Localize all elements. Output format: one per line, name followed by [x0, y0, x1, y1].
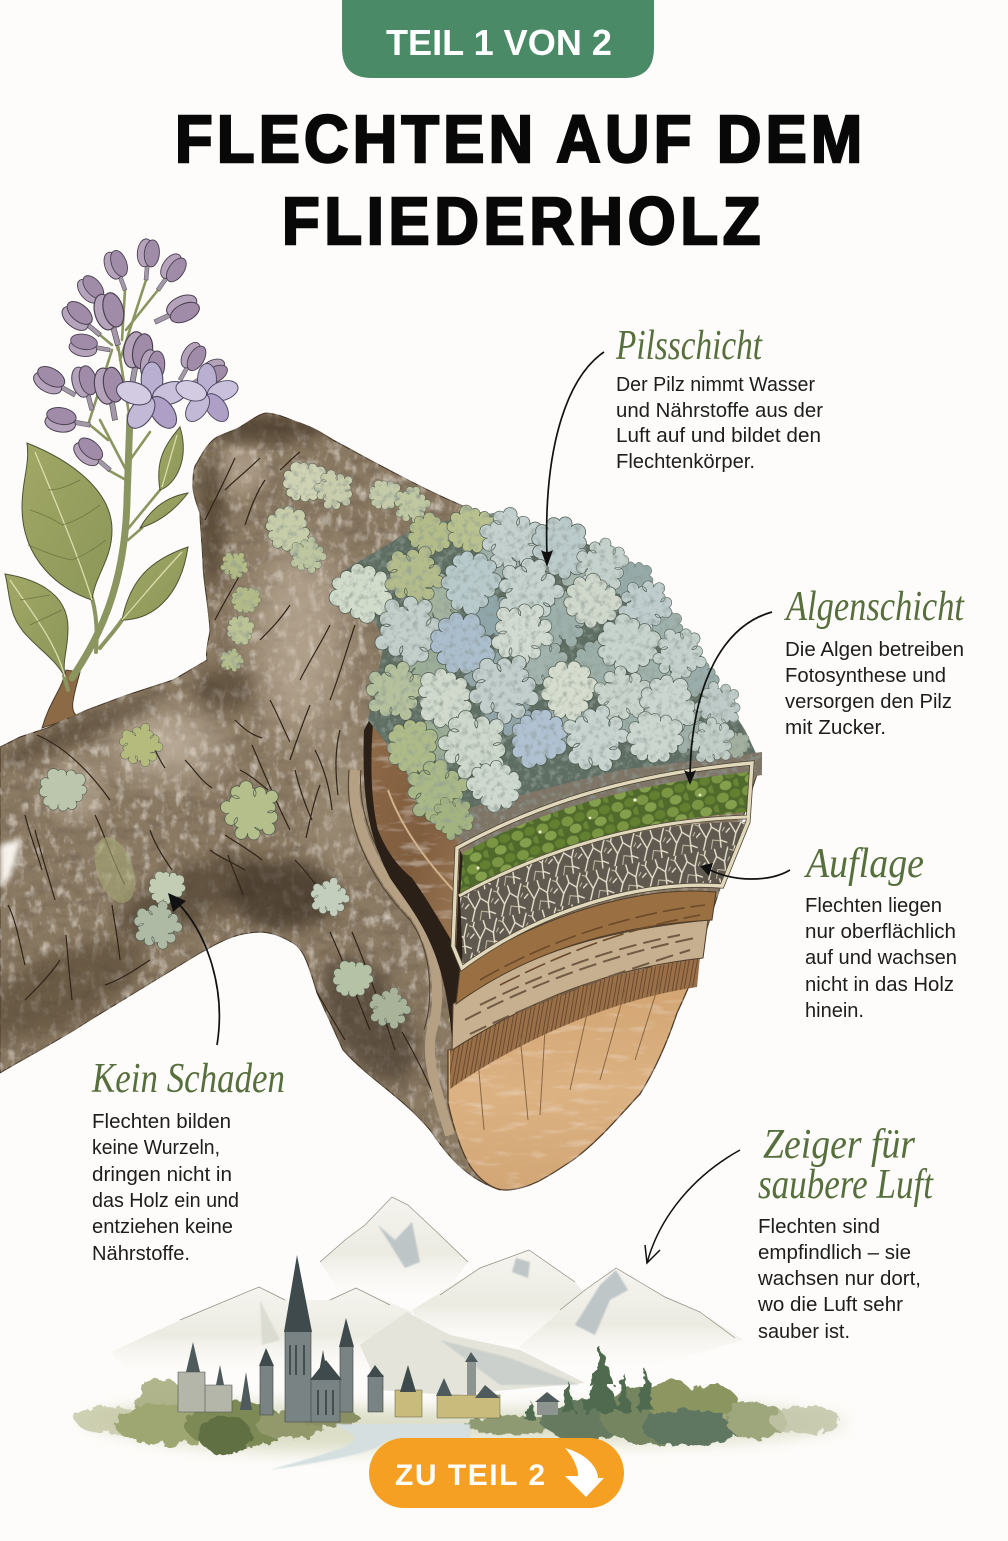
part badge: TEIL 1 VON 2: [386, 22, 612, 63]
callout: Kein Schaden: dringen nicht in: [92, 1164, 232, 1186]
callout: Zeiger für saubere Luft: saubere Luft: [758, 1162, 934, 1208]
lilac buds: [30, 238, 231, 479]
arrow: [541, 352, 604, 567]
cross-section: cream borders: [453, 763, 752, 968]
title: FLIEDERHOLZ: [282, 184, 760, 259]
callout: Auflage: auf und wachsen: [805, 947, 957, 969]
callout: Algenschicht: mit Zucker.: [785, 717, 886, 739]
lichen: under-layer filling the gaps: [392, 537, 750, 769]
lichen: main rosettes: [323, 495, 748, 843]
callout: Algenschicht: [684, 584, 965, 785]
callout: Pilsschicht: und Nährstoffe aus der: [616, 400, 823, 422]
illustration: lichen-covered branch: [0, 413, 762, 1190]
callout: Kein Schaden: Flechten bilden: [92, 1111, 231, 1133]
callout: Zeiger für saubere Luft: Zeiger für: [763, 1122, 916, 1168]
callout: Kein Schaden: entziehen keine: [92, 1216, 233, 1238]
callout: Algenschicht: Algenschicht: [784, 584, 965, 630]
callout: Pilsschicht: [541, 323, 823, 567]
callout: Auflage: Flechten liegen: [805, 895, 942, 917]
title: FLECHTEN AUF DEM: [175, 102, 862, 177]
small lichen patches on the branch: [39, 723, 411, 1029]
forest and trees: [76, 1347, 841, 1455]
illustration: lilac sprig: [5, 238, 241, 728]
callout: Kein Schaden: Kein Schaden: [91, 1056, 285, 1102]
bark: [0, 413, 760, 1190]
callout: Zeiger für saubere Luft: [645, 1122, 934, 1343]
twig and stems: [42, 280, 190, 728]
callout: Auflage: nur oberflächlich: [805, 921, 956, 943]
callout: Auflage: [700, 841, 957, 1022]
callout: Kein Schaden: keine Wurzeln,: [92, 1137, 220, 1159]
callout: Kein Schaden: Nährstoffe.: [92, 1243, 190, 1265]
callout: Zeiger für saubere Luft: Flechten sind: [758, 1216, 880, 1238]
side of the exposed wood: [364, 700, 465, 1040]
part badge: [342, 0, 654, 78]
callout: Kein Schaden: [91, 893, 285, 1265]
callout: Zeiger für saubere Luft: wachsen nur dort,: [757, 1268, 921, 1290]
large leaves: [5, 427, 188, 677]
next-part button: ZU TEIL 2: [395, 1459, 545, 1492]
mountain shadow washes: [260, 1222, 628, 1385]
town silhouette: [178, 1255, 560, 1422]
next-part button: [369, 1438, 624, 1508]
arrow: [168, 893, 219, 1045]
callout: Pilsschicht: Luft auf und bildet den: [616, 425, 821, 447]
callout: Kein Schaden: das Holz ein und: [92, 1190, 239, 1212]
callout: Auflage: nicht in das Holz: [805, 974, 954, 996]
callout: Pilsschicht: Pilsschicht: [615, 323, 763, 369]
arrow: [684, 612, 772, 785]
callout: Algenschicht: Fotosynthese und: [785, 665, 946, 687]
green ground wash: [80, 1403, 850, 1452]
cross-section: bark layers: [452, 891, 716, 1050]
cross-section: wood core: [448, 945, 703, 1190]
cross-section: algae layer: [460, 772, 750, 895]
bark fissures: [8, 452, 440, 1110]
callout: Pilsschicht: Flechtenkörper.: [616, 451, 755, 473]
callout: Pilsschicht: Der Pilz nimmt Wasser: [616, 374, 815, 396]
callout: Auflage: Auflage: [803, 841, 924, 887]
callout: Algenschicht: versorgen den Pilz: [785, 691, 952, 713]
river: [270, 1424, 470, 1470]
icon: curved arrow down: [565, 1448, 604, 1497]
callout: Auflage: hinein.: [805, 1000, 864, 1022]
callout: Zeiger für saubere Luft: wo die Luft sehr: [757, 1294, 903, 1316]
arrow: [645, 1150, 740, 1263]
callout: Algenschicht: Die Algen betreiben: [785, 639, 964, 661]
lilac open blossoms: [114, 362, 241, 433]
callout: Zeiger für saubere Luft: empfindlich – sie: [758, 1242, 911, 1264]
callout: Zeiger für saubere Luft: sauber ist.: [758, 1321, 850, 1343]
lichen: trailing patches on the knob: [217, 462, 460, 672]
title: [175, 102, 862, 259]
cross-section: hyphae layer: [460, 822, 745, 966]
arrow: [700, 863, 790, 879]
lichen mass: [217, 462, 762, 850]
illustration: mountains and town: [76, 1197, 850, 1470]
mountain range: [111, 1197, 744, 1395]
